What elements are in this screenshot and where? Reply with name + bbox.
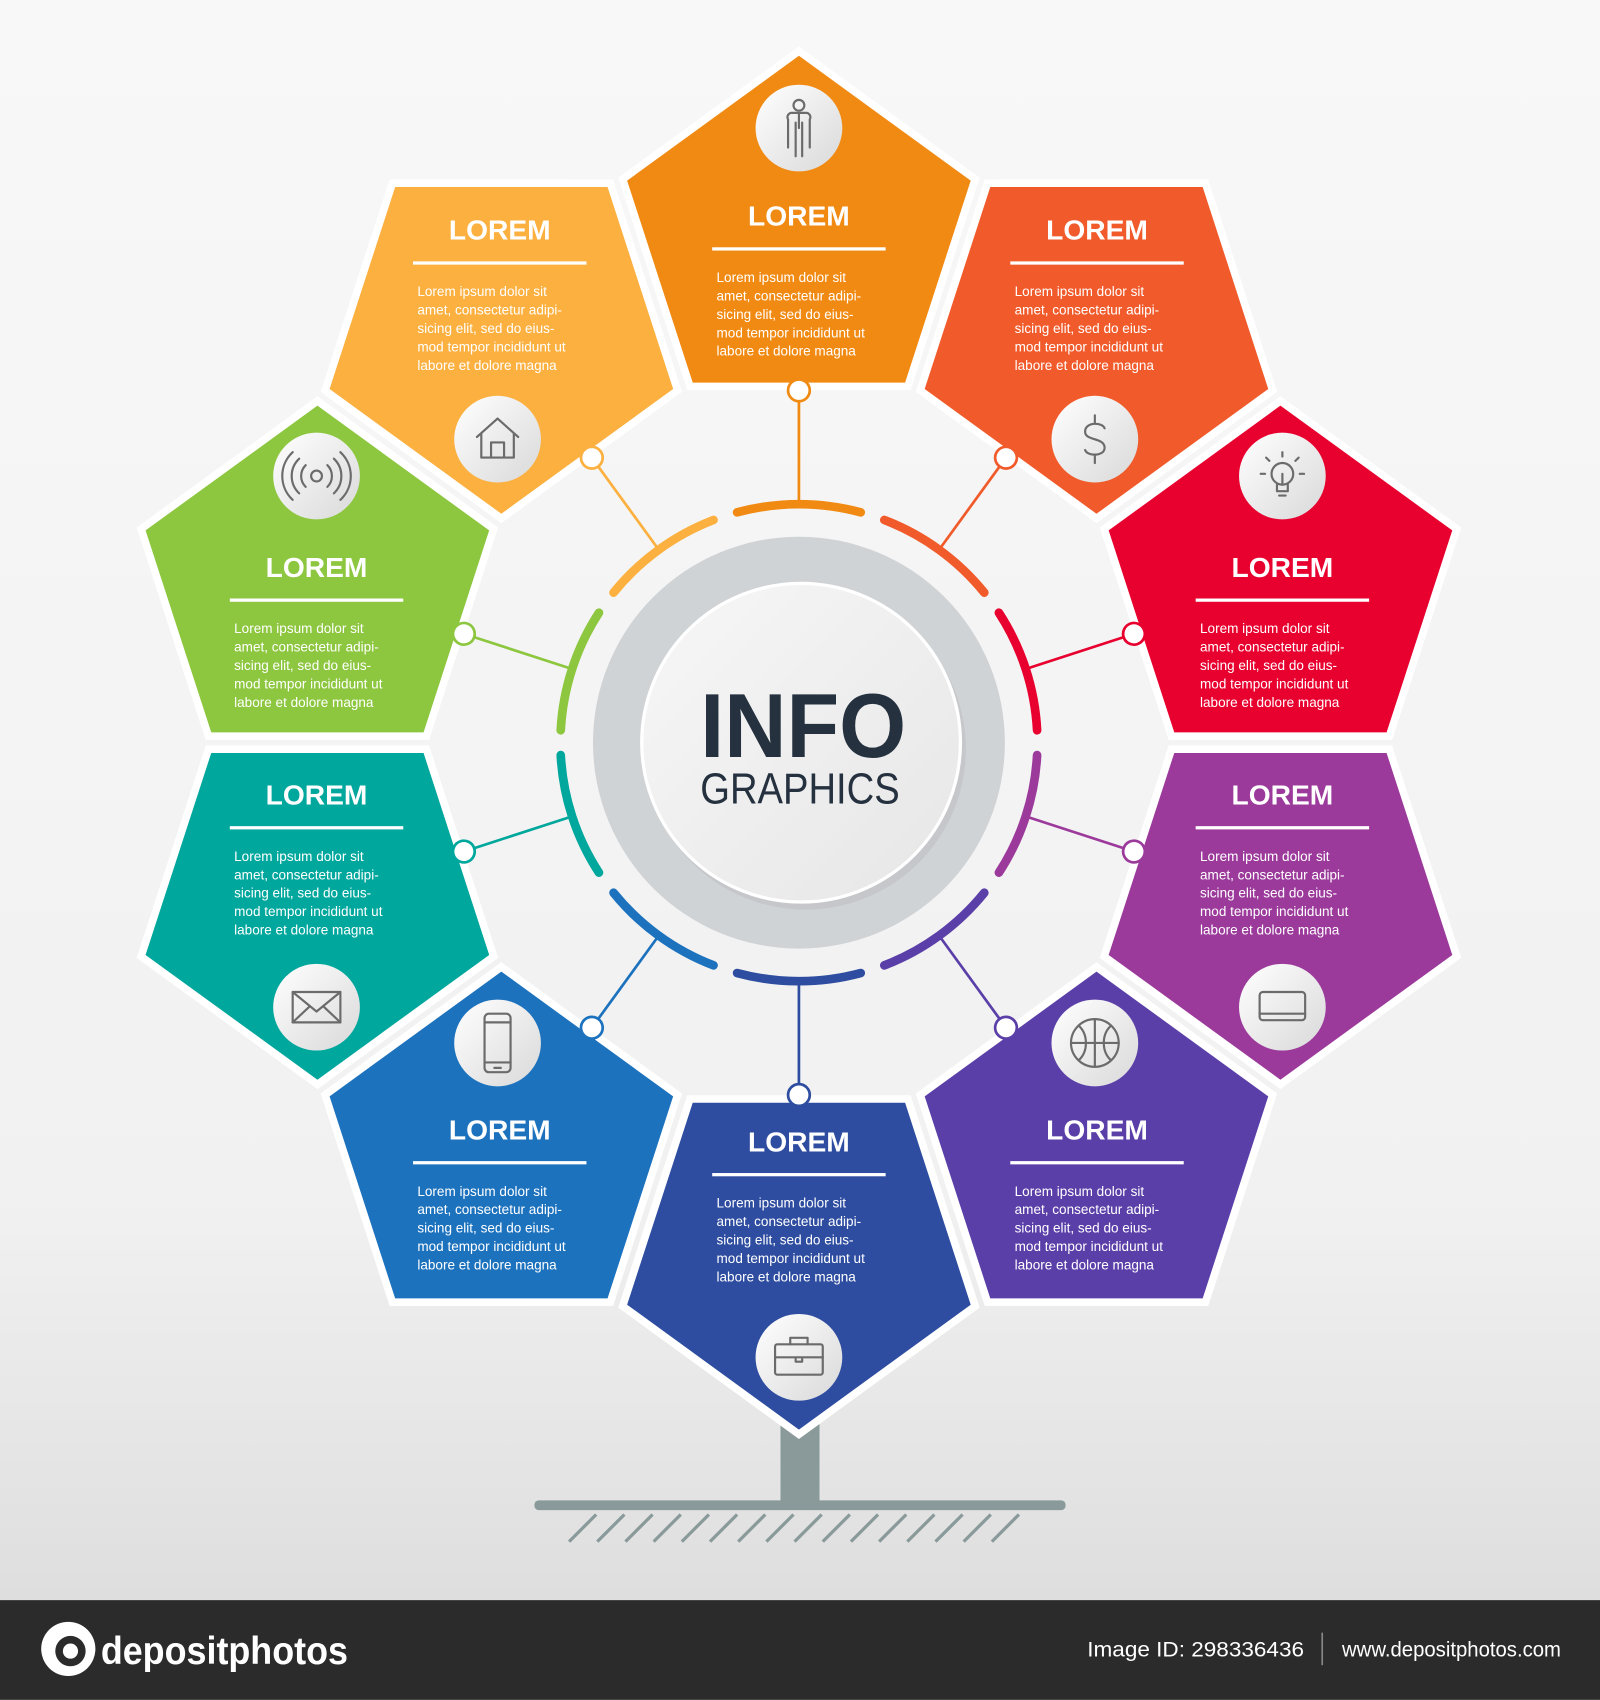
panel: violet: labore et dolore magna	[1015, 1258, 1154, 1273]
panel: orange-red: sicing elit, sed do eius-	[1015, 321, 1152, 336]
panel: yellow: Lorem ipsum dolor sit	[417, 284, 547, 299]
panel: blue: sicing elit, sed do eius-	[417, 1221, 554, 1236]
panel: dark blue: mod tempor incididunt ut	[717, 1251, 865, 1266]
panel: yellow	[250, 80, 732, 558]
center circle: INFO	[700, 676, 906, 777]
panel: dark blue: labore et dolore magna	[717, 1269, 856, 1284]
panel: top orange: mod tempor incididunt ut	[717, 325, 865, 340]
connector end circles	[450, 380, 1148, 1106]
panel: purple: amet, consectetur adipi-	[1200, 867, 1345, 882]
panel: teal: mod tempor incididunt ut	[234, 904, 383, 919]
panel: dark blue: sicing elit, sed do eius-	[717, 1233, 854, 1248]
panel: teal	[87, 685, 514, 1124]
panel: teal: labore et dolore magna	[234, 923, 374, 938]
panel: top orange: sicing elit, sed do eius-	[717, 307, 854, 322]
panel: green	[87, 361, 514, 800]
panel: red: amet, consectetur adipi-	[1200, 640, 1345, 655]
panel: orange-red	[866, 80, 1348, 558]
panel: purple: labore et dolore magna	[1200, 923, 1340, 938]
panel: blue: labore et dolore magna	[417, 1258, 557, 1273]
panel: purple: LOREM	[1232, 778, 1333, 810]
panel: blue: mod tempor incididunt ut	[417, 1239, 566, 1254]
panel: top orange: Lorem ipsum dolor sit	[717, 270, 846, 285]
panel: red: LOREM	[1232, 551, 1333, 583]
panel: blue	[250, 927, 732, 1406]
panel: top orange	[623, 51, 975, 386]
panel: violet: Lorem ipsum dolor sit	[1015, 1184, 1144, 1199]
panel: yellow: sicing elit, sed do eius-	[417, 321, 554, 336]
panel: green: Lorem ipsum dolor sit	[234, 621, 364, 636]
panel: orange-red: LOREM	[1046, 214, 1148, 246]
panel: green: LOREM	[266, 551, 367, 583]
panel: dark blue: amet, consectetur adipi-	[717, 1214, 861, 1229]
panel: teal: amet, consectetur adipi-	[234, 867, 379, 882]
panel: violet	[866, 927, 1348, 1406]
panel: blue: Lorem ipsum dolor sit	[417, 1184, 547, 1199]
panel: top orange: labore et dolore magna	[717, 344, 856, 359]
panel: blue: amet, consectetur adipi-	[417, 1202, 562, 1217]
panel: green: labore et dolore magna	[234, 695, 374, 710]
footer: Image ID: 298336436	[1087, 1637, 1304, 1662]
panel: top orange: LOREM	[748, 200, 850, 232]
footer: depositphotos	[101, 1630, 348, 1673]
panel: green: mod tempor incididunt ut	[234, 676, 383, 691]
panel: teal: sicing elit, sed do eius-	[234, 886, 371, 901]
panel: yellow: labore et dolore magna	[417, 358, 557, 373]
panel: purple: mod tempor incididunt ut	[1200, 904, 1349, 919]
panel: violet: sicing elit, sed do eius-	[1015, 1221, 1152, 1236]
center circle: GRAPHICS	[700, 765, 900, 813]
panel: red: labore et dolore magna	[1200, 695, 1340, 710]
panel: green: amet, consectetur adipi-	[234, 640, 379, 655]
footer: www.depositphotos.com	[1341, 1637, 1561, 1662]
panel: violet: mod tempor incididunt ut	[1015, 1239, 1163, 1254]
center circle	[593, 537, 1005, 949]
panel: yellow: amet, consectetur adipi-	[417, 302, 562, 317]
panel: dark blue: Lorem ipsum dolor sit	[717, 1196, 846, 1211]
stand	[534, 1420, 1066, 1542]
panel: dark blue	[623, 1099, 975, 1434]
footer	[0, 1600, 1600, 1700]
panel: orange-red: Lorem ipsum dolor sit	[1015, 284, 1144, 299]
panel: teal: LOREM	[266, 778, 367, 810]
panel: red: Lorem ipsum dolor sit	[1200, 621, 1330, 636]
panel: purple: sicing elit, sed do eius-	[1200, 886, 1337, 901]
panel: purple	[1083, 685, 1511, 1124]
panel: purple: Lorem ipsum dolor sit	[1200, 849, 1330, 864]
panel: orange-red: labore et dolore magna	[1015, 358, 1154, 373]
connectors and arcs	[453, 399, 1145, 1086]
panel: yellow: LOREM	[449, 214, 551, 246]
panel: teal: Lorem ipsum dolor sit	[234, 849, 364, 864]
panel: top orange: amet, consectetur adipi-	[717, 288, 861, 303]
panel: blue: LOREM	[449, 1113, 551, 1145]
panel: violet: amet, consectetur adipi-	[1015, 1202, 1159, 1217]
panel: red	[1083, 361, 1511, 800]
panel: violet: LOREM	[1046, 1113, 1148, 1145]
panel: red: sicing elit, sed do eius-	[1200, 658, 1337, 673]
panel: orange-red: amet, consectetur adipi-	[1015, 302, 1159, 317]
panel: green: sicing elit, sed do eius-	[234, 658, 371, 673]
panel: dark blue: LOREM	[748, 1125, 850, 1157]
panel: red: mod tempor incididunt ut	[1200, 676, 1349, 691]
panel: orange-red: mod tempor incididunt ut	[1015, 339, 1163, 354]
panel: yellow: mod tempor incididunt ut	[417, 339, 566, 354]
